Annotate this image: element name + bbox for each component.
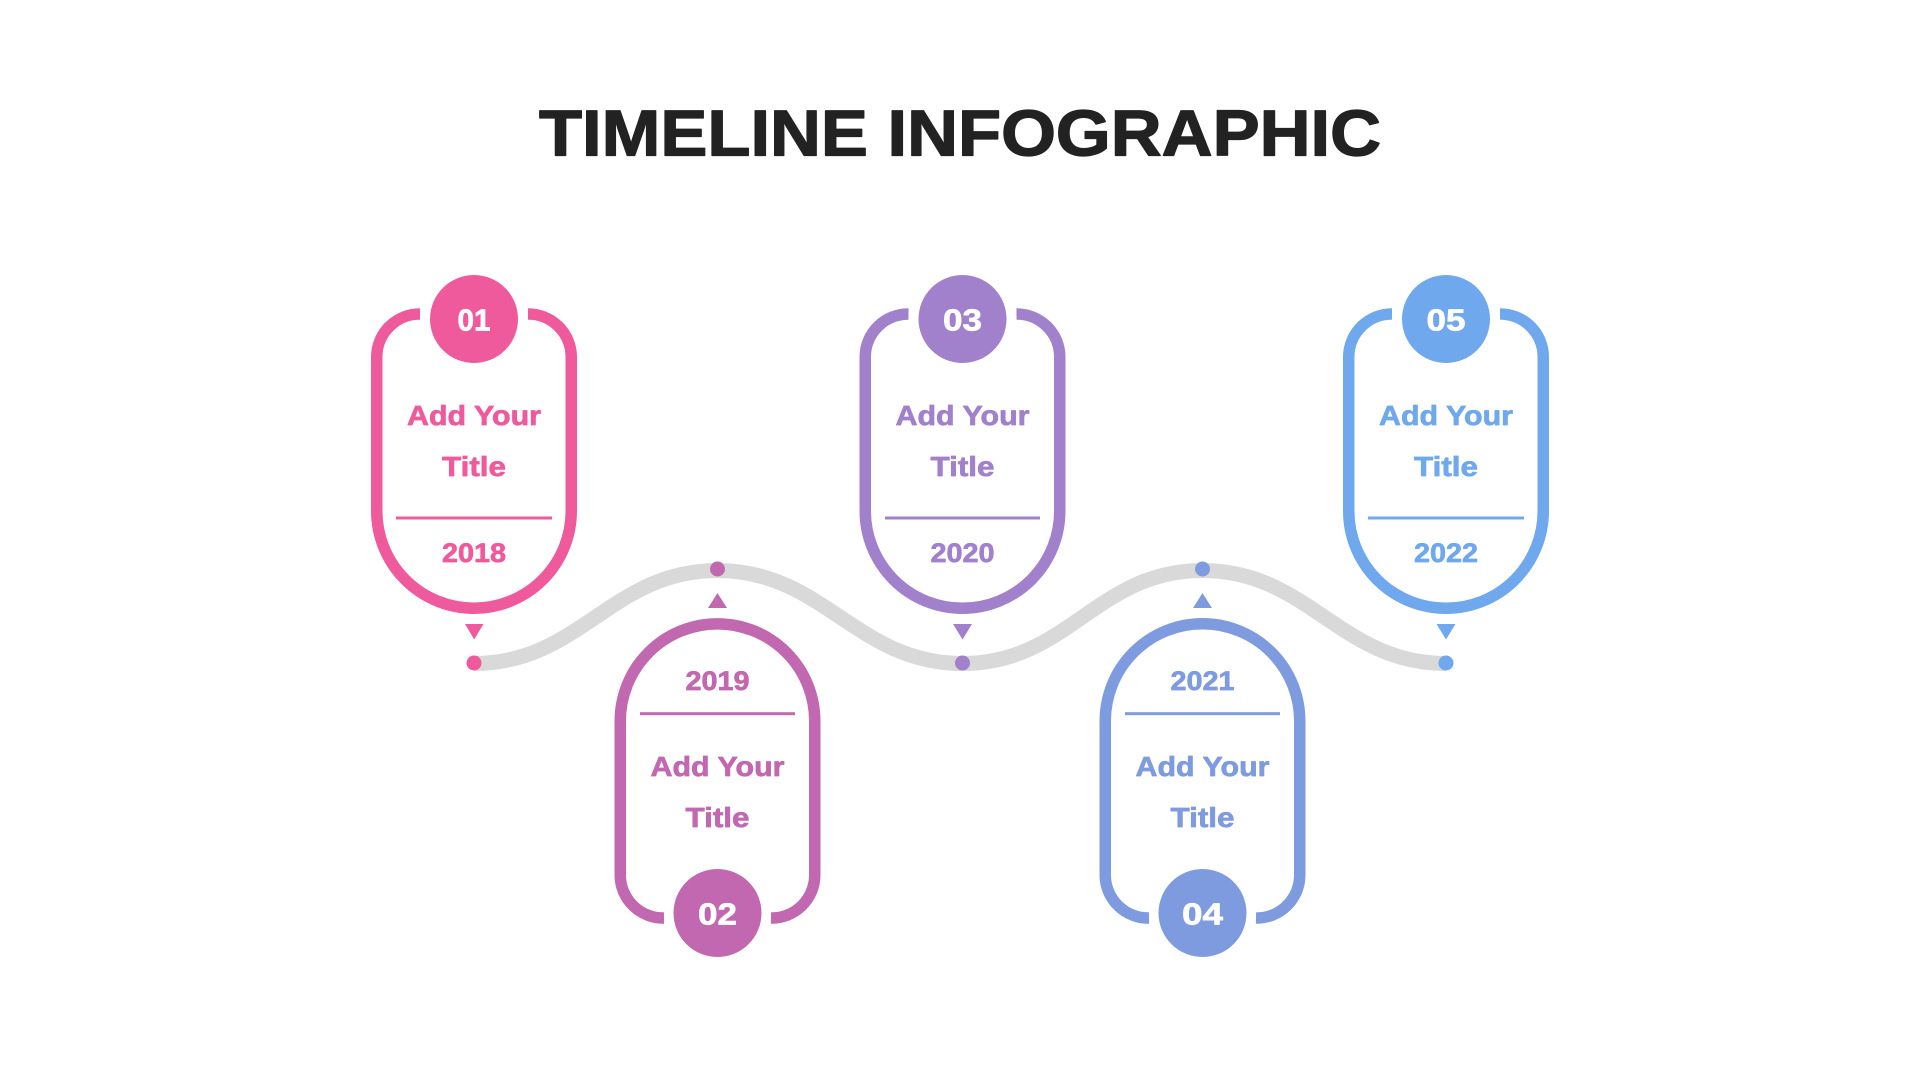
card 05 pointer arrow: [1436, 624, 1456, 640]
card 01 title: Add Your: [407, 400, 541, 431]
card 02 divider: [640, 712, 795, 715]
card 04 title: Title: [1170, 802, 1234, 833]
card 02 title: Title: [686, 802, 750, 833]
card 02 year: 2019: [686, 666, 750, 696]
card 04 timeline dot: [1195, 562, 1210, 576]
card 01 timeline dot: [466, 656, 482, 670]
card 05 title: [1379, 400, 1513, 482]
card 02 timeline dot: [710, 562, 725, 576]
card 01 number badge: [430, 275, 518, 363]
card 03 pointer arrow: [953, 624, 972, 640]
card 05: [1349, 275, 1543, 670]
card 02 title: [650, 751, 785, 833]
card 03 title: Title: [930, 451, 994, 482]
card 05 title: Title: [1414, 451, 1478, 482]
card 04 number badge: 04: [1182, 896, 1224, 932]
card 02 number badge: [674, 869, 762, 957]
card 01 year: 2018: [442, 538, 506, 568]
card 01 outline: [377, 314, 571, 608]
card 03 divider: [885, 516, 1040, 520]
card 04 year: 2021: [1170, 666, 1234, 696]
card 03 outline: [865, 314, 1060, 608]
card 03 title: [896, 400, 1030, 482]
card 02 title: Add Your: [650, 751, 785, 782]
card 05 number badge: 05: [1426, 302, 1466, 338]
card 03 number badge: [918, 275, 1006, 363]
card 01: [377, 275, 571, 670]
card 04 title: Add Your: [1136, 751, 1270, 782]
card 03: [865, 275, 1060, 670]
card 05 number badge: [1402, 275, 1490, 363]
card 02: [620, 562, 815, 957]
card 04 number badge: [1158, 869, 1246, 957]
card 02 number badge: 02: [698, 896, 737, 932]
card 03 title: Add Your: [896, 400, 1030, 431]
card 03 timeline dot: [955, 656, 970, 670]
card 05 divider: [1368, 516, 1524, 520]
card 03 number badge: 03: [943, 302, 982, 338]
card 05 outline: [1349, 314, 1543, 608]
card 02 pointer arrow: [708, 593, 727, 608]
card 01 divider: [396, 516, 552, 520]
card 04 pointer arrow: [1193, 593, 1212, 608]
card 01 pointer arrow: [465, 624, 484, 640]
card 04 outline: [1105, 624, 1300, 918]
card 05 title: Add Your: [1379, 400, 1513, 431]
wavy timeline path: [474, 570, 1446, 664]
card 02 outline: [620, 624, 815, 918]
card 01 number badge: 01: [458, 302, 490, 338]
title: TIMELINE INFOGRAPHIC: [539, 96, 1381, 170]
card 01 title: Title: [442, 451, 506, 482]
card 04: [1105, 562, 1300, 957]
card 01 title: [407, 400, 541, 482]
card 04 divider: [1125, 712, 1280, 715]
card 05 year: 2022: [1414, 538, 1478, 568]
card 04 title: [1136, 751, 1270, 833]
card 03 year: 2020: [930, 538, 994, 568]
card 05 timeline dot: [1438, 656, 1454, 670]
